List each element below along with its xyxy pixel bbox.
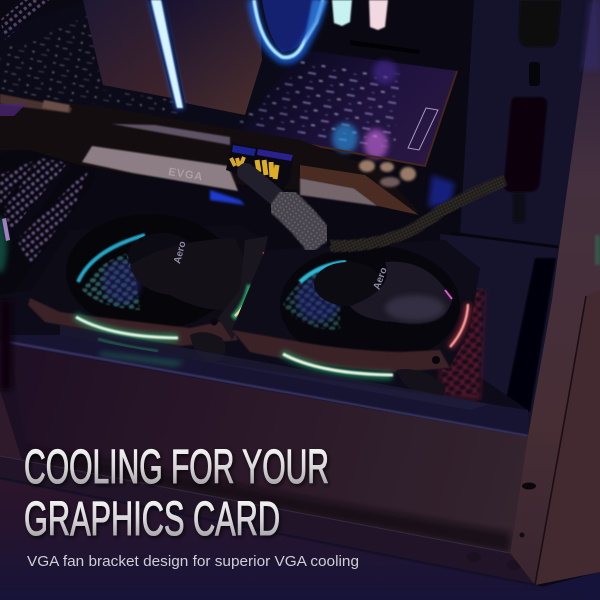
copper wedge bbox=[300, 165, 419, 215]
backplate top notches bbox=[0, 94, 72, 113]
pcb component specks center bbox=[240, 70, 300, 135]
bottom corner navy bbox=[541, 572, 600, 600]
fan right top arc bbox=[300, 262, 346, 282]
fan right frame bbox=[232, 330, 450, 372]
title: cooling for your graphics card bbox=[24, 441, 329, 546]
pcb glow violet bbox=[373, 60, 397, 84]
panel: fan left screws bbox=[210, 318, 218, 326]
pcb glow pink bbox=[364, 129, 388, 159]
panel: bottom floor bbox=[0, 478, 600, 600]
fan right LED glow bbox=[282, 353, 392, 376]
fan left right LED bbox=[233, 285, 250, 318]
fan right pink accent bbox=[445, 290, 452, 299]
panel: graphics card PCB bbox=[0, 0, 457, 166]
panel: shroud top edge bbox=[5, 325, 528, 436]
fan left lower LED bbox=[98, 339, 158, 351]
silver EVGA plate left bbox=[82, 146, 238, 191]
subtitle text: VGA fan bracket design for superior VGA cooling bbox=[27, 553, 359, 570]
pcb edge bbox=[300, 71, 457, 166]
pcb glow blue bbox=[332, 123, 358, 153]
light bar pink bbox=[369, 0, 388, 30]
panel: PSU shroud front bbox=[0, 345, 528, 553]
panel: cooler block left bbox=[83, 0, 172, 98]
fan right logo: Aero bbox=[372, 266, 390, 291]
fan right bolt bbox=[432, 356, 440, 364]
fan right hub bbox=[314, 262, 382, 306]
fan right pink LED bbox=[450, 304, 468, 347]
fan left top arc bbox=[78, 235, 145, 282]
pcb component specks right bbox=[300, 60, 400, 148]
dark slot strip on card bbox=[350, 40, 420, 54]
lower tray surface bbox=[440, 234, 560, 412]
fan left blue mesh wash bbox=[102, 260, 142, 304]
blue glow right bbox=[428, 175, 455, 207]
title: cooling for your graphics card: COOLING FOR YOUR bbox=[24, 441, 329, 494]
green reflection on edge bbox=[100, 352, 185, 366]
fan left navy frame bbox=[28, 225, 265, 335]
wall slot middle bbox=[504, 97, 547, 192]
right ring fill bbox=[304, 0, 328, 44]
fan right navy frame bbox=[232, 240, 480, 370]
pillar seam bbox=[535, 296, 586, 585]
panel: right pillar bbox=[510, 0, 600, 600]
fan right blade bbox=[350, 262, 452, 324]
panel: fan left bbox=[28, 214, 268, 362]
fan mount feet bbox=[190, 332, 226, 362]
pillar notch bbox=[522, 482, 536, 490]
panel: rear bracket vents bbox=[0, 140, 95, 300]
panel: GPU backplate bbox=[0, 94, 455, 215]
silver bar upper bbox=[112, 124, 230, 145]
pcb outlined rectangle bbox=[408, 108, 438, 150]
green reflection bbox=[595, 235, 600, 265]
fan right pink LED glow bbox=[450, 304, 468, 347]
title: cooling for your graphics card: GRAPHICS CARD bbox=[24, 493, 280, 546]
fan left frame side bbox=[218, 236, 268, 340]
pillar hole bbox=[520, 532, 524, 538]
fan right lower LED glow bbox=[300, 380, 370, 388]
panel: right case wall with cut-outs bbox=[440, 0, 596, 436]
fan right mount foot bbox=[396, 369, 445, 400]
fan left hub bbox=[128, 233, 196, 277]
vertical light strip bbox=[149, 0, 184, 109]
fan left pink LED bbox=[264, 252, 266, 262]
icon: thick sleeved cable bbox=[246, 172, 322, 245]
EVGA logo: EVGA bbox=[168, 166, 204, 183]
bracket light tabs bbox=[2, 218, 10, 241]
panel: shroud floor under fans bbox=[0, 290, 528, 436]
tray back edge bbox=[450, 233, 558, 247]
pcb component specks left bbox=[0, 15, 180, 115]
panel: cooler ring glow bbox=[149, 0, 388, 109]
fan right LED bbox=[283, 354, 393, 375]
grommet post bbox=[513, 193, 525, 223]
pale connector pins bbox=[359, 160, 416, 187]
fan left mesh bbox=[82, 252, 140, 310]
bracket teal glow bbox=[0, 217, 7, 273]
fan right blue wash bbox=[296, 278, 340, 322]
wall small clip bbox=[529, 62, 540, 86]
wall slot upper bbox=[519, 0, 561, 47]
purple vent gleam bbox=[0, 104, 26, 116]
icon: power connector bbox=[226, 143, 293, 190]
fan right mesh bbox=[283, 262, 340, 330]
pillar right panel bbox=[535, 290, 600, 585]
lower slot bbox=[505, 258, 556, 412]
silver plate right bbox=[300, 178, 378, 206]
blue glow under card bbox=[210, 190, 245, 205]
panel: fan right bbox=[232, 240, 480, 400]
blue top light bbox=[582, 0, 600, 70]
fan left blade bbox=[130, 238, 262, 310]
panel: shroud shadow band bbox=[0, 442, 510, 553]
panel: perforated mesh near fan 2 bbox=[440, 290, 485, 400]
panel: left pillar bbox=[0, 300, 40, 500]
rail screw bbox=[467, 552, 481, 562]
rail screw right bbox=[507, 560, 521, 570]
fan left LED bbox=[75, 316, 178, 338]
light bar cyan bbox=[332, 0, 352, 26]
icon: thin braided cable bbox=[330, 180, 505, 246]
panel: lower rail bbox=[0, 456, 535, 585]
panel: cooler block right bbox=[165, 0, 262, 115]
fan left logo: Aero bbox=[172, 240, 189, 265]
panel: top-left vent strip bbox=[0, 0, 50, 40]
fan left frame bbox=[28, 298, 238, 346]
fan right blade highlight bbox=[385, 295, 445, 321]
